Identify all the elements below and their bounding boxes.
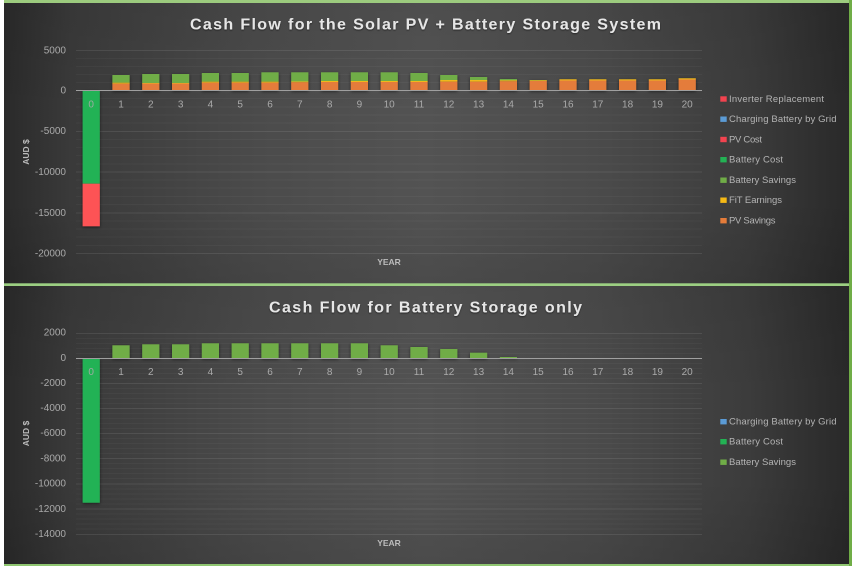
bar: year 3 xyxy=(172,74,189,90)
y axis title: AUD $ xyxy=(21,139,31,165)
x axis year labels: 2 xyxy=(148,100,154,110)
bar: year 12 xyxy=(440,349,457,358)
bar: year 0 xyxy=(83,90,100,226)
x axis year labels: 4 xyxy=(208,367,214,378)
bar: year 4 xyxy=(202,343,219,358)
x axis year labels: 0 xyxy=(88,367,94,378)
bar: year 7 xyxy=(291,343,308,358)
bar: year 9 xyxy=(351,343,368,358)
x axis year labels: 19 xyxy=(652,100,663,110)
legend item: Battery Savings: Battery Savings xyxy=(729,457,796,468)
x axis year labels: 8 xyxy=(327,367,333,378)
y axis labels: -14000 xyxy=(35,529,66,540)
bar: year 0 xyxy=(83,358,100,503)
legend item: PV Savings: PV Savings xyxy=(729,216,776,226)
x axis year labels: 16 xyxy=(562,100,574,110)
y axis labels: 5000 xyxy=(44,46,66,56)
y axis title: AUD $ xyxy=(21,420,31,446)
legend item: FiT Earnings: FiT Earnings xyxy=(729,195,782,206)
bar: year 14 xyxy=(500,79,517,90)
x axis year labels: 20 xyxy=(682,367,693,378)
bar: year 12 xyxy=(440,75,457,90)
bar: year 19 xyxy=(649,79,666,90)
x axis year labels: 17 xyxy=(592,100,604,110)
x axis year labels: 10 xyxy=(384,100,395,110)
x axis year labels: 5 xyxy=(237,100,243,110)
x axis year labels: 12 xyxy=(443,367,455,378)
x axis year labels: 6 xyxy=(267,367,273,378)
bars xyxy=(83,343,517,503)
bar: year 1 xyxy=(112,345,130,358)
bar: year 2 xyxy=(142,74,159,90)
bar: year 10 xyxy=(381,72,398,90)
bar: year 7 xyxy=(291,72,308,90)
x axis year labels: 18 xyxy=(622,367,634,378)
x axis year labels: 6 xyxy=(267,100,273,110)
x axis year labels: 18 xyxy=(622,100,634,110)
x axis year labels: 9 xyxy=(357,367,363,378)
x axis year labels: 9 xyxy=(357,100,363,110)
bar: year 5 xyxy=(232,73,249,90)
x axis year labels: 17 xyxy=(592,367,604,378)
x axis year labels: 14 xyxy=(503,367,514,378)
x axis year labels: 2 xyxy=(148,367,154,378)
legend item: Battery Savings: Battery Savings xyxy=(729,175,796,186)
title: Cash Flow for the Solar PV + Battery Storage System xyxy=(190,16,661,34)
legend item: Inverter Replacement: Inverter Replacement xyxy=(729,94,824,105)
bar: year 8 xyxy=(321,343,338,358)
y axis labels: 0 xyxy=(60,86,66,96)
bar: year 14 xyxy=(500,357,517,358)
x axis year labels xyxy=(88,100,693,110)
x axis title: YEAR xyxy=(377,257,401,267)
x axis year labels: 11 xyxy=(414,367,425,378)
bar: year 17 xyxy=(589,79,606,90)
y axis labels: -20000 xyxy=(35,248,66,260)
legend item: Battery Cost: Battery Cost xyxy=(729,154,783,166)
bar: year 8 xyxy=(321,72,338,90)
x axis year labels: 7 xyxy=(297,100,303,110)
x axis year labels: 7 xyxy=(297,367,303,378)
bar: year 4 xyxy=(202,73,219,90)
bar: year 13 xyxy=(470,353,487,358)
stacked bars xyxy=(83,72,696,226)
y axis labels: -5000 xyxy=(40,126,66,137)
x axis title: YEAR xyxy=(377,538,401,548)
x axis year labels xyxy=(88,367,693,378)
y axis labels: -10000 xyxy=(35,167,66,178)
y axis labels: -10000 xyxy=(35,478,66,490)
bar: year 3 xyxy=(172,344,189,358)
y axis labels: -15000 xyxy=(35,208,66,219)
y axis labels: -4000 xyxy=(40,403,66,414)
x axis year labels: 0 xyxy=(88,100,94,110)
x axis year labels: 16 xyxy=(562,367,574,378)
x axis year labels: 20 xyxy=(682,100,693,110)
legend item: Charging Battery by Grid: Charging Battery by Grid xyxy=(729,114,836,125)
bar: year 15 xyxy=(530,80,547,90)
x axis year labels: 14 xyxy=(503,100,514,110)
bar: year 20 xyxy=(679,78,696,90)
bar: year 1 xyxy=(112,75,130,90)
y axis labels: -6000 xyxy=(40,428,66,439)
legend item: PV Cost: PV Cost xyxy=(729,134,762,146)
x axis year labels: 5 xyxy=(237,367,243,378)
bar: year 2 xyxy=(142,344,159,358)
x axis year labels: 4 xyxy=(208,100,214,110)
bar: year 13 xyxy=(470,77,487,90)
y axis labels: -12000 xyxy=(35,504,66,515)
bar: year 9 xyxy=(351,72,368,90)
x axis year labels: 3 xyxy=(178,100,184,110)
x axis year labels: 8 xyxy=(327,100,333,110)
bar: year 16 xyxy=(559,79,577,90)
x axis year labels: 1 xyxy=(118,367,124,378)
y axis labels: 2000 xyxy=(44,328,66,338)
y axis labels: 0 xyxy=(60,353,66,364)
x axis year labels: 13 xyxy=(473,100,485,110)
x axis year labels: 15 xyxy=(533,100,544,110)
legend item: Charging Battery by Grid: Charging Battery by Grid xyxy=(729,416,836,428)
x axis year labels: 1 xyxy=(118,100,124,110)
x axis year labels: 15 xyxy=(533,367,544,378)
y axis labels xyxy=(35,328,66,540)
title: Cash Flow for Battery Storage only xyxy=(269,300,582,316)
legend xyxy=(720,416,836,468)
bar: year 10 xyxy=(381,345,398,358)
y axis labels: -8000 xyxy=(40,454,66,464)
bar: year 6 xyxy=(261,343,279,358)
panel: battery storage only cash flow xyxy=(4,286,849,564)
x axis year labels: 13 xyxy=(473,367,485,378)
legend item: Battery Cost: Battery Cost xyxy=(729,436,783,448)
bar: year 6 xyxy=(261,72,279,90)
x axis year labels: 19 xyxy=(652,367,663,378)
y axis labels xyxy=(35,46,66,260)
bar: year 18 xyxy=(619,79,636,90)
bar: year 11 xyxy=(410,347,428,358)
y axis labels: -2000 xyxy=(40,378,66,389)
legend xyxy=(720,94,836,226)
panel: solar PV + battery cash flow xyxy=(4,3,849,284)
x axis year labels: 11 xyxy=(414,100,425,110)
bar: year 5 xyxy=(232,343,249,358)
bar: year 11 xyxy=(410,73,428,90)
x axis year labels: 3 xyxy=(178,367,184,378)
x axis year labels: 12 xyxy=(443,100,455,110)
x axis year labels: 10 xyxy=(384,367,395,378)
